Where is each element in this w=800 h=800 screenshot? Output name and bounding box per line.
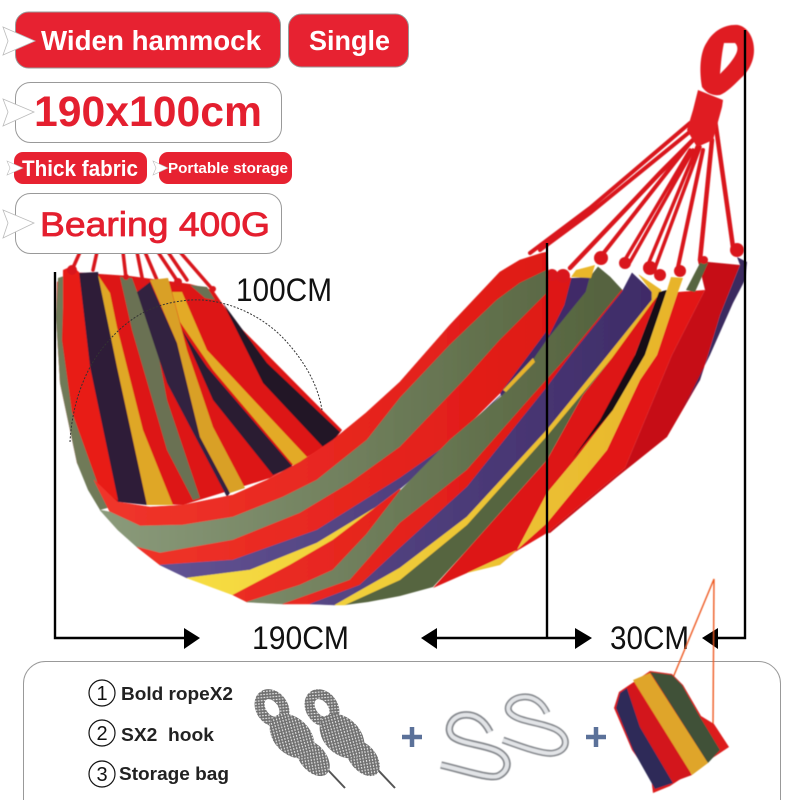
- item 2: SX2 hook: [89, 720, 215, 746]
- S hook 2: [503, 697, 565, 753]
- badge: Bearing 400G: [3, 194, 282, 254]
- rope coil 2: [304, 689, 395, 788]
- label 30CM: 30CM: [610, 620, 689, 656]
- badge: Portable storage: Portable storage: [168, 160, 288, 177]
- dimension guide lines: [55, 30, 745, 638]
- right end ropes: [530, 120, 733, 268]
- item 1: Bold rope: [89, 680, 233, 706]
- badge: Thick fabric: Thick fabric: [22, 156, 138, 181]
- item 3: Storage bag: [89, 761, 229, 787]
- hammock front fabric stripes: [94, 252, 747, 605]
- bag stripe yellow: [633, 673, 708, 775]
- bag stripe green: [650, 672, 720, 763]
- hanging loop and knot: [687, 25, 754, 147]
- icon: plus sign 2: [586, 727, 606, 747]
- dimension lines and arrows: [55, 30, 745, 649]
- bag stripe navy: [616, 688, 673, 789]
- label 100CM: 100CM: [236, 272, 332, 308]
- item 1: Bold rope: Bold ropeX2: [121, 684, 233, 704]
- dimension circle arc 100CM: [70, 300, 322, 442]
- bag red outline: [614, 671, 729, 793]
- badge: Single: [288, 14, 408, 67]
- bag drawstring: [672, 579, 714, 725]
- rope end knots: [67, 243, 744, 292]
- badge: Single: Single: [309, 25, 390, 56]
- item 3: Storage bag: Storage bag: [119, 764, 229, 784]
- item 2: SX2 hook: 2: [96, 723, 108, 745]
- rope coil 1: [254, 689, 345, 788]
- badge: Widen hammock: [3, 12, 280, 68]
- label 190CM: 190CM: [252, 620, 349, 656]
- hammock inner fabric, left end: [56, 266, 342, 510]
- item 1: Bold rope: 1: [96, 683, 108, 705]
- badge: Widen hammock: Widen hammock: [41, 25, 261, 56]
- bag stripe red: [627, 683, 692, 782]
- arrowheads: [184, 628, 718, 649]
- icon: S hooks: [441, 697, 565, 777]
- item 2: SX2 hook: SX2 hook: [121, 725, 215, 745]
- item 3: Storage bag: 3: [96, 764, 108, 786]
- icon: two rope coils: [254, 689, 395, 788]
- badge: Bearing 400G: Bearing 400G: [40, 206, 270, 244]
- badge: 190x100cm: 190x100cm: [34, 88, 262, 136]
- S hook 1: [441, 715, 507, 777]
- accessories panel: [24, 579, 780, 800]
- icon: storage bag: [614, 579, 729, 793]
- icon: plus sign 1: [402, 727, 422, 747]
- badge: Thick fabric: [7, 152, 147, 184]
- badge: Portable storage: [153, 152, 292, 184]
- hammock: [56, 25, 754, 605]
- left end ropes: [72, 252, 213, 290]
- badge: 190x100cm: [3, 82, 282, 142]
